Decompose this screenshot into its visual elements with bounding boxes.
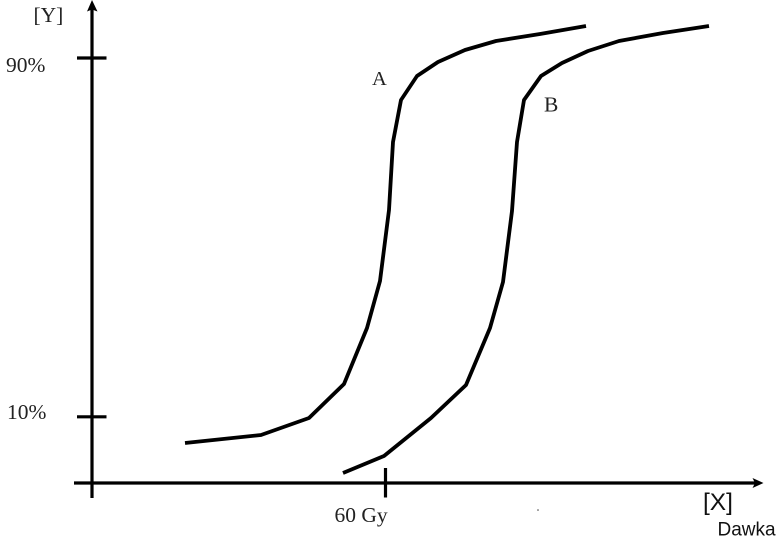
label 90%: 90% bbox=[6, 53, 46, 77]
label B: B bbox=[544, 92, 558, 116]
curve B bbox=[343, 26, 709, 473]
tick: 10% bbox=[77, 415, 106, 418]
label 10%: 10% bbox=[7, 400, 46, 424]
curve A bbox=[185, 26, 586, 443]
tick: 90% bbox=[77, 56, 106, 60]
x axis with arrow bbox=[74, 478, 764, 488]
label A: A bbox=[372, 68, 387, 90]
label Dawka: Dawka bbox=[718, 520, 776, 540]
small dot bbox=[537, 509, 539, 511]
x axis label: [X] bbox=[703, 489, 733, 516]
label 60 Gy: 60 Gy bbox=[334, 503, 388, 527]
tick: 60 Gy bbox=[384, 468, 387, 498]
y axis label: [Y] bbox=[34, 3, 63, 27]
y axis with arrow bbox=[87, 0, 98, 498]
